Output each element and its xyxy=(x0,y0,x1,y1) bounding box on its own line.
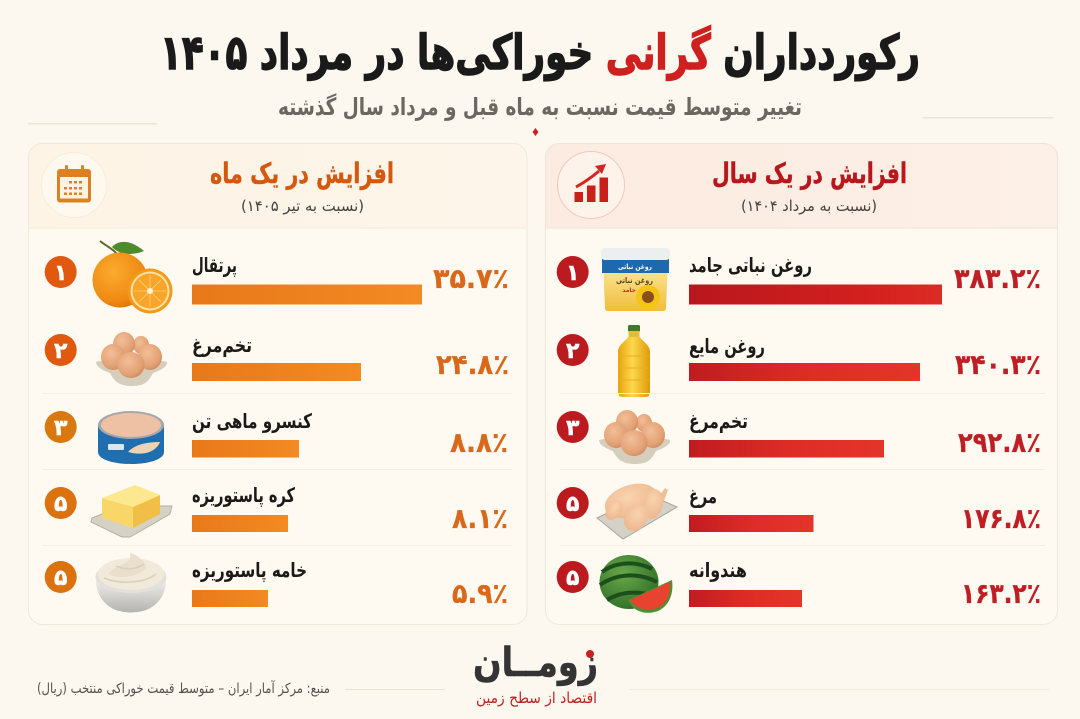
bar xyxy=(192,363,361,381)
rank badge xyxy=(45,411,77,443)
panel background xyxy=(28,144,527,624)
icon: eggs xyxy=(599,410,670,464)
value: ۳۴۰.۳٪ xyxy=(955,348,1041,381)
bar xyxy=(192,440,299,458)
rank badge: ۳ xyxy=(54,416,68,441)
bar xyxy=(689,440,884,458)
value: ۲۹۲.۸٪ xyxy=(958,426,1041,459)
logo: زومــان xyxy=(473,640,598,686)
item name: کنسرو ماهی تن xyxy=(192,409,312,433)
rank badge: ۲ xyxy=(54,339,68,364)
item name: تخم‌مرغ xyxy=(192,333,252,357)
row: liquid oil xyxy=(557,325,1041,397)
subtitle: تغییر متوسط قیمت نسبت به ماه قبل و مرداد سال گذشته xyxy=(278,93,802,121)
panel heading: افزایش در یک ماه xyxy=(210,157,394,190)
red diamond ornament xyxy=(532,128,538,136)
icon: cream bowl xyxy=(96,553,166,612)
rank badge xyxy=(45,561,77,593)
icon: calendar xyxy=(42,152,106,218)
row: eggs xyxy=(45,332,509,386)
item name: روغن نباتی جامد xyxy=(689,253,812,277)
item name: مرغ xyxy=(689,484,717,508)
rank badge xyxy=(557,487,589,519)
icon: oil tub: روغن نباتی xyxy=(618,263,652,271)
row: orange xyxy=(45,241,509,314)
row: chicken xyxy=(557,477,1041,539)
logo red dot xyxy=(586,650,594,658)
value: ۳۵.۷٪ xyxy=(433,262,509,295)
panel: one-year increase xyxy=(546,144,1058,624)
rank badge: ۵ xyxy=(54,492,67,517)
rank badge: ۱ xyxy=(566,261,579,286)
icon: orange xyxy=(92,241,172,314)
item name: هندوانه xyxy=(689,558,747,582)
rank badge: ۱ xyxy=(54,261,67,286)
tagline: اقتصاد از سطح زمین xyxy=(476,689,597,707)
icon: oil tub xyxy=(601,248,670,311)
row: canned tuna xyxy=(45,409,508,464)
panel header band xyxy=(546,144,1058,228)
icon: oil tub: روغن نباتی xyxy=(616,276,653,285)
panel: one-month increase xyxy=(28,144,527,624)
rank badge xyxy=(45,487,77,519)
icon: butter on dish xyxy=(91,485,172,537)
value: ۳۸۳.۲٪ xyxy=(954,262,1041,295)
bar xyxy=(689,363,920,381)
rank badge xyxy=(557,411,589,443)
rank badge: ۵ xyxy=(566,566,579,591)
rank badge: ۵ xyxy=(566,492,579,517)
icon: oil bottle xyxy=(618,325,650,397)
bar xyxy=(192,284,422,304)
rank badge: ۳ xyxy=(566,416,580,441)
panel header band xyxy=(28,144,527,228)
value: ۸.۱٪ xyxy=(452,502,508,535)
panel subheading: (نسبت به تیر ۱۴۰۵) xyxy=(241,197,364,215)
panel background xyxy=(546,144,1058,624)
item name: خامه پاستوریزه xyxy=(192,558,307,583)
icon: oil tub: جامد xyxy=(622,287,636,294)
rank badge xyxy=(45,256,77,288)
value: ۲۴.۸٪ xyxy=(436,348,509,381)
item name: پرتقال xyxy=(192,253,237,278)
icon: chicken on tray xyxy=(597,477,677,539)
value: ۵.۹٪ xyxy=(452,577,508,610)
value: ۱۶۳.۲٪ xyxy=(961,577,1041,610)
footer source note: منبع: مرکز آمار ایران – متوسط قیمت خوراکی منتخب (ریال) xyxy=(37,680,330,697)
bar xyxy=(689,515,814,532)
rank badge xyxy=(557,256,589,288)
rank badge xyxy=(45,334,77,366)
panel subheading: (نسبت به مرداد ۱۴۰۴) xyxy=(741,197,877,215)
icon: tuna can xyxy=(98,411,164,464)
rank badge xyxy=(557,334,589,366)
row: eggs xyxy=(557,409,1041,464)
item name: کره پاستوریزه xyxy=(192,483,295,508)
icon: eggs xyxy=(96,332,167,386)
value: ۸.۸٪ xyxy=(450,426,508,459)
value: ۱۷۶.۸٪ xyxy=(961,502,1041,535)
row: solid vegetable oil xyxy=(557,248,1041,311)
rank badge: ۵ xyxy=(54,566,67,591)
row: pasteurized cream xyxy=(45,553,508,612)
panel heading: افزایش در یک سال xyxy=(712,157,907,190)
icon: watermelon xyxy=(600,555,672,613)
item name: روغن مایع xyxy=(689,334,765,358)
icon: rising chart xyxy=(558,152,624,218)
rank badge: ۲ xyxy=(566,339,580,364)
bar xyxy=(689,590,802,607)
bar xyxy=(689,284,942,304)
row: pasteurized butter xyxy=(45,483,508,537)
logo xyxy=(473,640,598,707)
bar xyxy=(192,515,288,532)
row: watermelon xyxy=(557,555,1041,613)
rank badge xyxy=(557,561,589,593)
item name: تخم‌مرغ xyxy=(689,409,748,433)
title: رکوردداران گرانی خوراکی‌ها در مرداد ۱۴۰۵ xyxy=(160,25,920,81)
bar xyxy=(192,590,268,607)
